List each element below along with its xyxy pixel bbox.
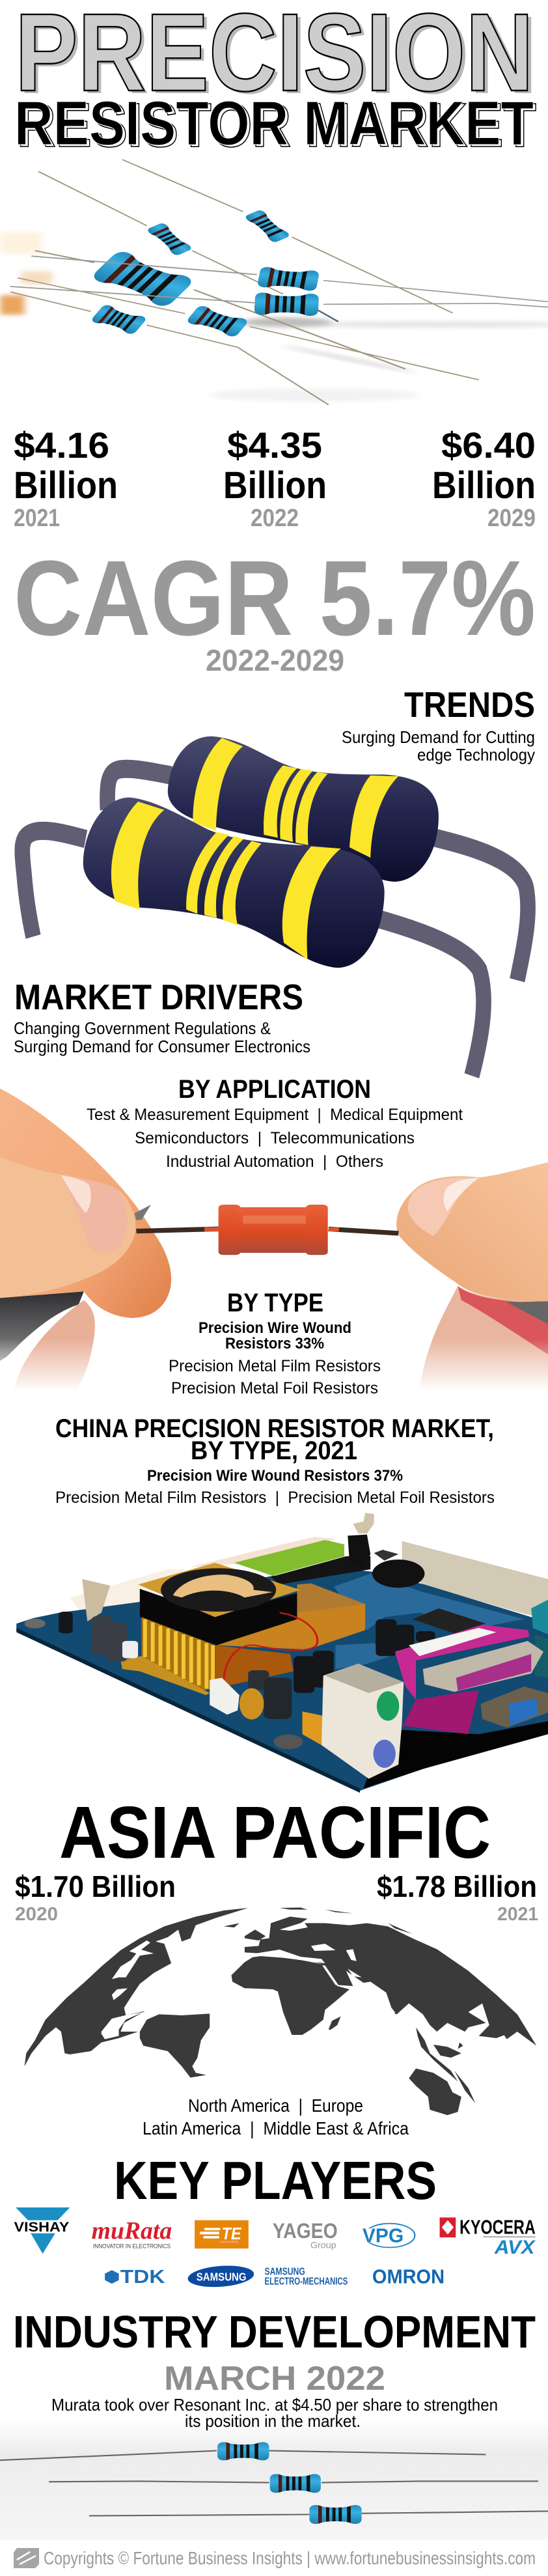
text block: by type: BY TYPE <box>227 1289 323 1317</box>
logo: Murata <box>92 2217 172 2250</box>
text block: China market by type <box>55 1414 495 1507</box>
photo: blue resistors <box>0 160 548 405</box>
stat: 2029 value: Billion <box>432 464 536 507</box>
logo: Samsung Electro-Mechanics: SAMSUNG <box>265 2265 305 2277</box>
CAGR callout: 2022-2029 <box>206 643 344 677</box>
stat: 2022 value: Billion <box>223 464 327 507</box>
text block: trends <box>342 684 535 764</box>
text block: market drivers: MARKET DRIVERS <box>14 977 303 1017</box>
text block: other regions: Latin America | Middle East & Africa <box>143 2118 409 2138</box>
stat: 2021 value: $4.16 <box>14 425 109 466</box>
logo: Samsung Electro-Mechanics <box>265 2265 348 2287</box>
logo: Vishay: VISHAY <box>14 2220 69 2235</box>
world map globe <box>15 1907 536 2115</box>
text block: market drivers <box>14 977 310 1056</box>
stat: 2022 value <box>223 425 327 532</box>
stat: 2022 value: $4.35 <box>227 425 322 466</box>
stat: 2020 value: 2020 <box>15 1904 58 1925</box>
text block: other regions: North America | Europe <box>188 2095 363 2116</box>
stat: 2029 value: 2029 <box>487 505 536 532</box>
text block: trends: edge Technology <box>417 745 535 764</box>
text block: trends: TRENDS <box>404 684 535 725</box>
text block: market drivers: Changing Government Regulations & <box>14 1018 271 1038</box>
stat: 2029 value <box>432 425 536 532</box>
logo: Vishay <box>14 2207 70 2254</box>
text block: other regions <box>143 2095 409 2138</box>
heading: key players: KEY PLAYERS <box>114 2150 437 2211</box>
stat: 2020 value <box>15 1869 176 1925</box>
text block: China market by type: CHINA PRECISION RESISTOR MARKET, <box>55 1414 494 1443</box>
logo: Samsung Electro-Mechanics: ELECTRO-MECHANICS <box>265 2275 348 2287</box>
text block: by application: Test & Measurement Equipment | Medical Equipment <box>87 1106 463 1124</box>
heading: Asia Pacific: ASIA PACIFIC <box>59 1791 491 1873</box>
text block: March 2022 development: its position in the market. <box>185 2411 361 2431</box>
stat: 2021 value <box>377 1869 538 1925</box>
text block: China market by type: BY TYPE, 2021 <box>191 1436 357 1465</box>
logos: key players <box>14 2207 536 2289</box>
text block: by type: Precision Wire Wound <box>199 1319 351 1337</box>
logo: Murata: muRata <box>92 2217 172 2245</box>
photo: three resistors on white <box>0 2418 548 2540</box>
logo: Kyocera AVX: AVX <box>494 2237 536 2258</box>
text block: by type <box>169 1289 381 1397</box>
text block: March 2022 development: Murata took over Resonant Inc. at $4.50 per share to strengthen <box>51 2395 498 2415</box>
logo: TE: TE <box>221 2224 241 2243</box>
logo: Yageo: YAGEO <box>273 2219 338 2243</box>
text block: by application: Semiconductors | Telecommunications <box>135 1129 415 1147</box>
photo: fingers holding resistor <box>0 1089 548 1392</box>
text block: March 2022 development: MARCH 2022 <box>164 2360 385 2398</box>
icon: Fortune Business Insights logo <box>14 2548 39 2568</box>
logo: Murata: INNOVATOR IN ELECTRONICS <box>93 2243 171 2250</box>
logo: Omron: OMRON <box>372 2266 445 2288</box>
stat: 2021 value: 2021 <box>497 1904 538 1925</box>
logo: Samsung: SAMSUNG <box>197 2271 247 2284</box>
stat: 2021 value: $1.78 Billion <box>377 1869 537 1903</box>
stat: 2029 value: $6.40 <box>441 425 536 466</box>
logo: Yageo: Group <box>310 2241 336 2250</box>
text block: by application: BY APPLICATION <box>178 1075 371 1104</box>
stat: 2021 value: 2021 <box>14 505 60 532</box>
text block: trends: Surging Demand for Cutting <box>342 727 535 747</box>
logo: Samsung <box>187 2263 255 2289</box>
text block: by application <box>87 1075 463 1171</box>
stat: 2021 value: Billion <box>14 464 118 507</box>
logo: TE: connectivity <box>219 2240 239 2244</box>
text block: China market by type: Precision Wire Wound Resistors 37% <box>147 1467 403 1485</box>
text block: China market by type: Precision Metal Film Resistors | Precision Metal Foil Resistors <box>55 1489 495 1507</box>
stat: 2020 value: $1.70 Billion <box>15 1869 176 1903</box>
text block: by type: Precision Metal Film Resistors <box>169 1357 381 1375</box>
text block: March 2022 development <box>51 2360 498 2431</box>
logo: VPG: VPG <box>363 2225 404 2247</box>
text block: market drivers: Surging Demand for Consumer Electronics <box>14 1037 310 1056</box>
text block: by application: Industrial Automation | Others <box>166 1153 383 1171</box>
illustration: yellow banded resistors <box>22 736 528 1076</box>
logo: TE <box>195 2220 249 2248</box>
text block: by type: Resistors 33% <box>225 1335 324 1352</box>
logo: TDK: TDK <box>120 2266 165 2287</box>
text block: by type: Precision Metal Foil Resistors <box>171 1379 378 1397</box>
photo: motherboard <box>16 1513 548 1793</box>
logo: Kyocera AVX <box>440 2217 536 2258</box>
stat: 2021 value <box>14 425 118 532</box>
stat: 2022 value: 2022 <box>251 505 299 532</box>
logo: Yageo <box>273 2219 338 2250</box>
